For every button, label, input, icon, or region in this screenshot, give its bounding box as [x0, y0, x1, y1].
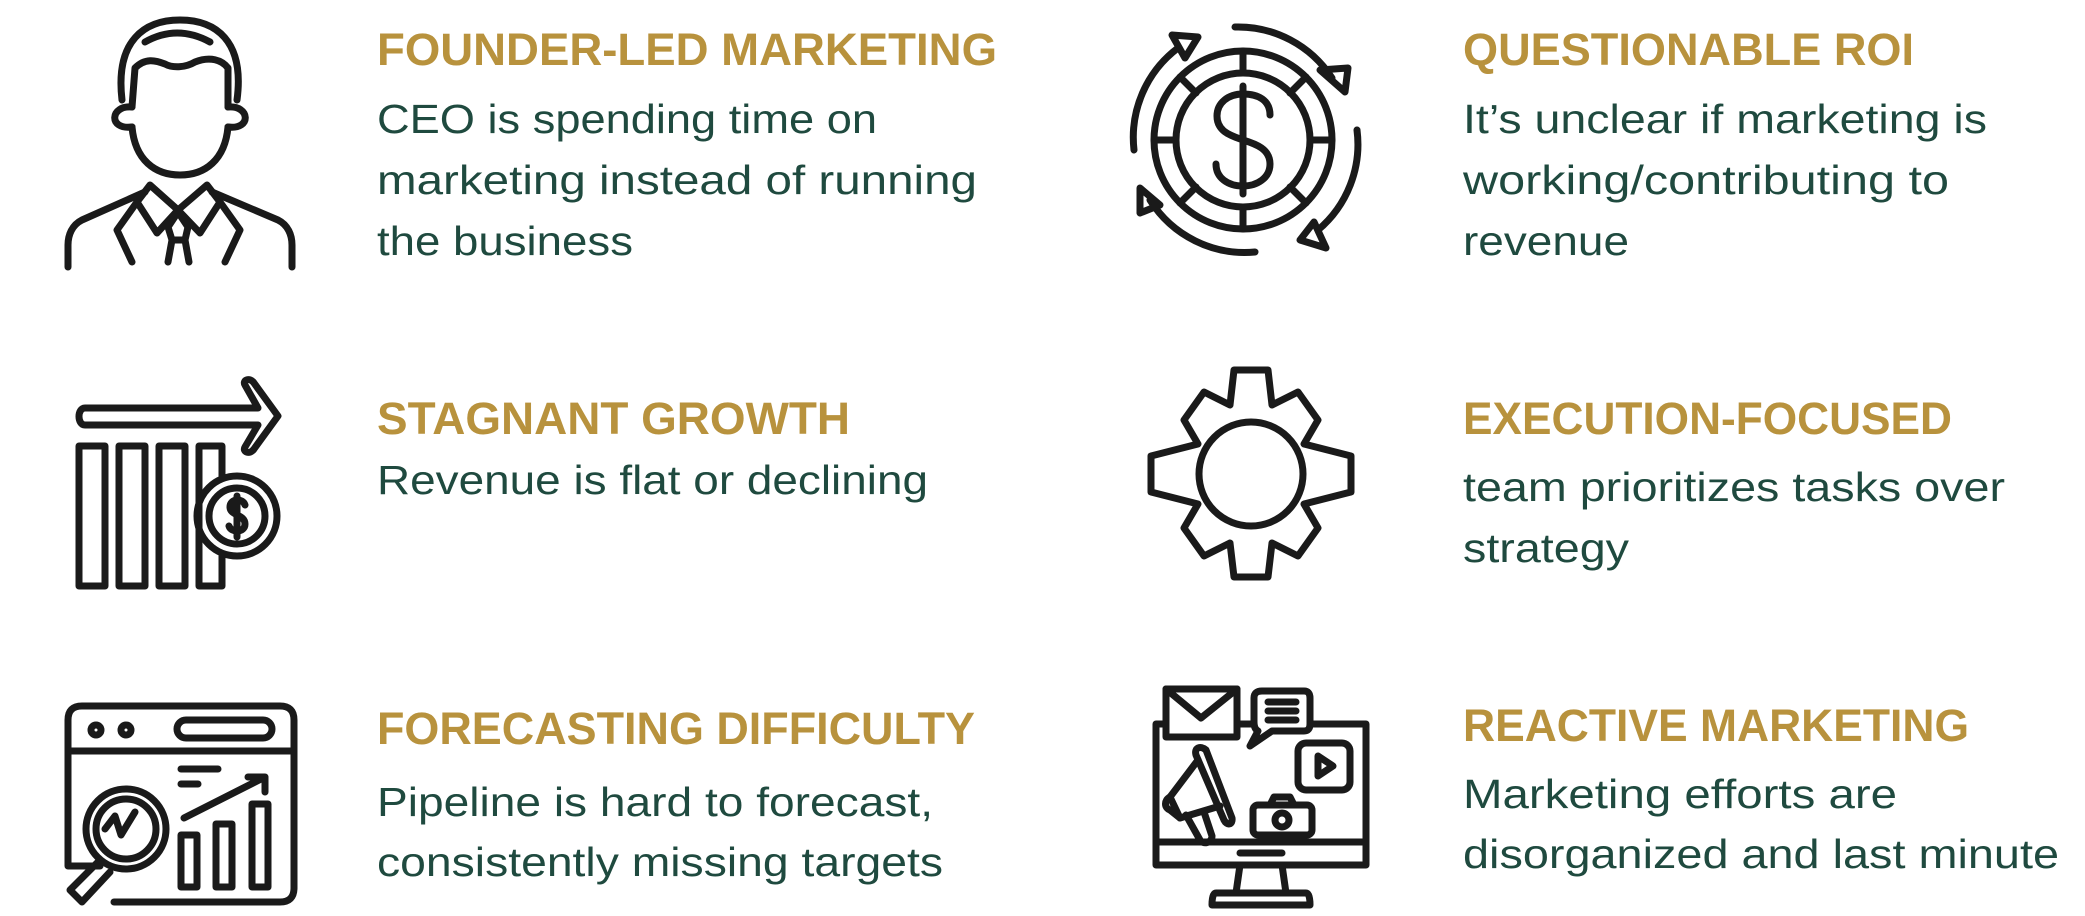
heading: founder-led marketing: FOUNDER-LED MARKETING [377, 24, 997, 75]
text: founder-led description: marketing instead of running [377, 157, 977, 203]
text: forecasting description: consistently missing targets [377, 839, 943, 885]
text: roi description [1462, 96, 1987, 264]
heading: questionable roi: QUESTIONABLE ROI [1463, 24, 1914, 75]
text: reactive description: Marketing efforts are [1463, 771, 1897, 817]
icon: dollar with circular arrows [1133, 27, 1358, 252]
icon: founder person [68, 20, 292, 267]
text: execution description [1463, 464, 2005, 571]
text: reactive description [1463, 771, 2059, 877]
heading: forecasting difficulty: FORECASTING DIFFICULTY [377, 703, 975, 754]
text: founder-led description [377, 96, 977, 264]
icon: gear [1151, 370, 1351, 577]
heading: stagnant growth: STAGNANT GROWTH [377, 393, 850, 444]
icon: forecasting browser chart [68, 706, 294, 902]
text: founder-led description: CEO is spending time on [377, 96, 877, 142]
heading: reactive marketing: REACTIVE MARKETING [1463, 700, 1969, 751]
text: forecasting description [377, 779, 943, 885]
text: roi description: It’s unclear if marketing is [1463, 96, 1987, 142]
icon: monitor with marketing channels [1156, 689, 1366, 905]
icon: bars with arrow and coin [79, 380, 278, 586]
heading: execution-focused: EXECUTION-FOCUSED [1463, 393, 1952, 444]
text: roi description: revenue [1463, 218, 1629, 264]
text: execution description: team prioritizes tasks over [1463, 464, 2005, 510]
text: stagnant description: Revenue is flat or declining [377, 457, 928, 503]
text: reactive description: disorganized and last minute [1463, 831, 2059, 877]
text: execution description: strategy [1463, 525, 1630, 571]
text: forecasting description: Pipeline is hard to forecast, [377, 779, 933, 825]
text: roi description: working/contributing to [1462, 157, 1949, 203]
text: founder-led description: the business [377, 218, 633, 264]
